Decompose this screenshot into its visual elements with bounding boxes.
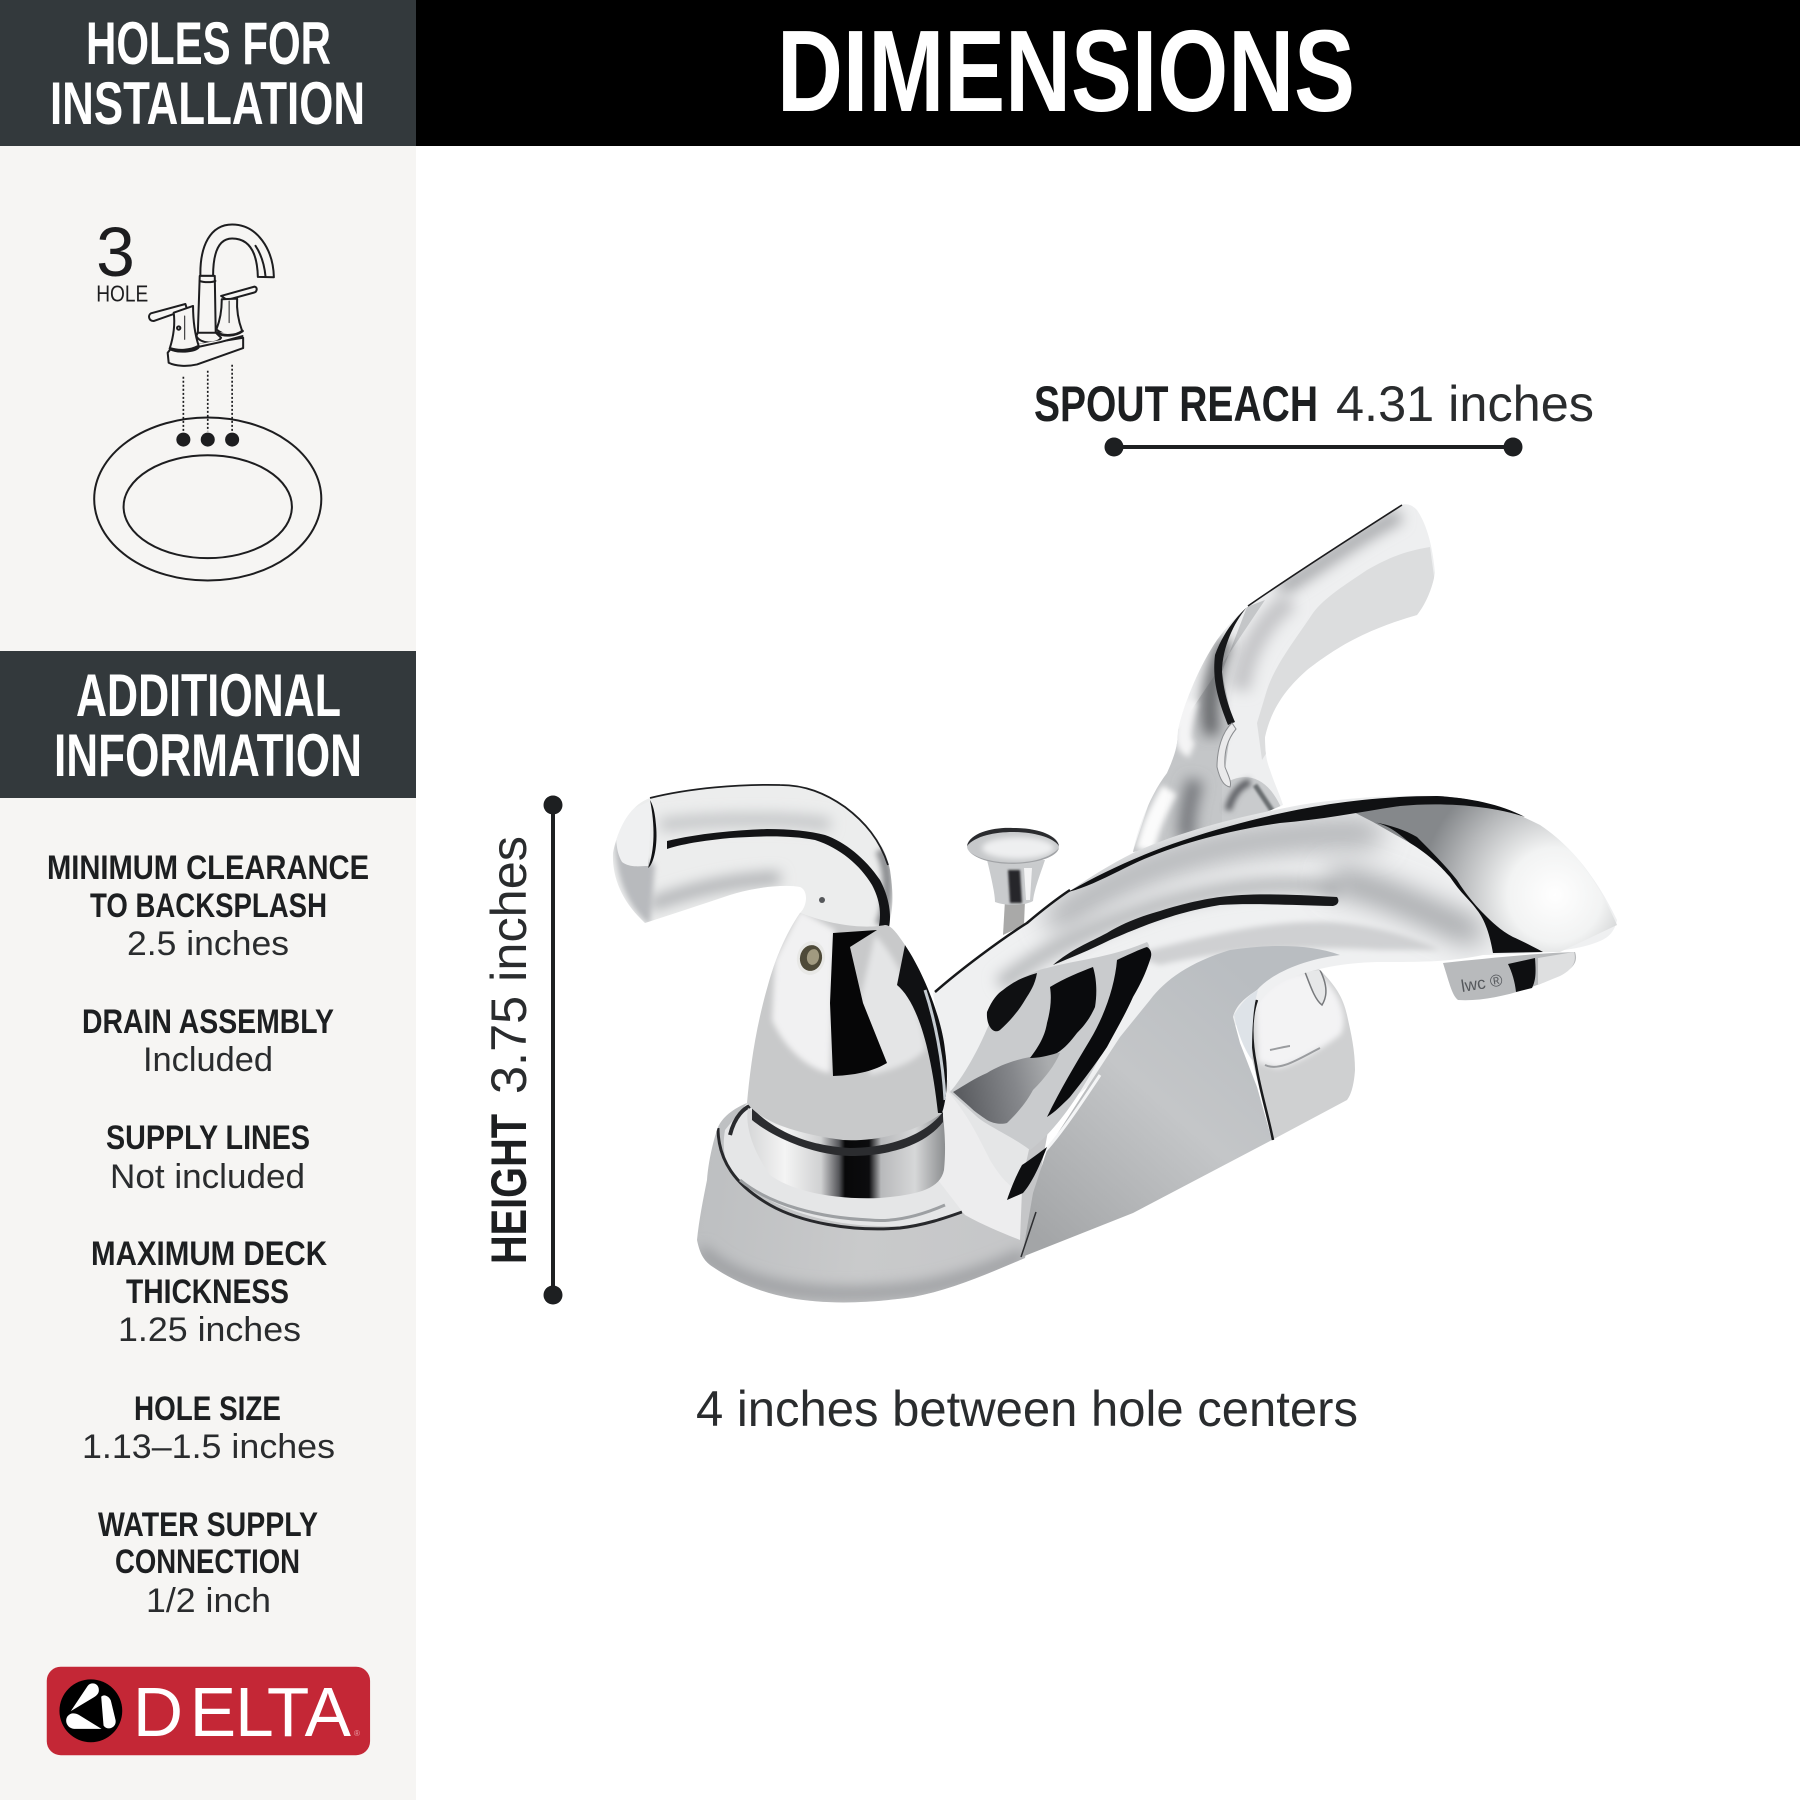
spout reach line	[1104, 438, 1522, 456]
header: holes for installation	[0, 0, 416, 146]
header bar: dimensions	[416, 0, 1800, 146]
spec: supply lines: SUPPLY LINES	[106, 1119, 310, 1157]
spec: minimum clearance	[47, 849, 369, 963]
body dark slash	[1007, 1147, 1047, 1200]
hub collar	[747, 1108, 945, 1198]
rear handle	[1130, 504, 1440, 860]
spec: supply lines	[106, 1119, 310, 1196]
spout body	[1007, 946, 1340, 1257]
header: additional information	[0, 651, 416, 798]
grip crease	[667, 829, 890, 931]
wordmark: D	[133, 1673, 183, 1751]
spec: maximum deck thickness	[91, 1235, 327, 1349]
spout nose	[1356, 796, 1617, 953]
hub right strip	[897, 945, 950, 1113]
icon: 3 hole faucet and sink	[94, 213, 321, 581]
spec: hole size: 1.13–1.5 inches	[82, 1428, 335, 1466]
spec: water supply connection: WATER SUPPLY	[98, 1506, 318, 1544]
dimension: height: 3.75 inches	[481, 836, 537, 1094]
spec: minimum clearance: MINIMUM CLEARANCE	[47, 849, 369, 887]
spec: maximum deck thickness: 1.25 inches	[118, 1311, 301, 1349]
left side panel	[0, 0, 416, 1800]
drain knob	[967, 828, 1059, 935]
height line	[544, 796, 562, 1304]
sink basin	[124, 455, 292, 558]
valve hole	[794, 938, 828, 978]
grip cap crease	[648, 800, 657, 868]
rear opening edge	[1252, 1000, 1273, 1140]
spec: supply lines: Not included	[110, 1158, 305, 1196]
header: additional information: ADDITIONAL	[76, 662, 341, 729]
front handle grip	[613, 785, 892, 933]
spec: drain assembly	[82, 1003, 334, 1079]
sink outer rim	[94, 418, 321, 581]
wordmark: T	[267, 1673, 309, 1751]
spout top band	[1068, 796, 1525, 892]
mounting holes	[176, 433, 239, 447]
dotted guide lines	[183, 365, 232, 431]
label: 3 hole: 3	[96, 213, 135, 291]
spout crease	[1053, 894, 1338, 965]
spec: water supply connection	[98, 1506, 318, 1620]
spec: minimum clearance: 2.5 inches	[127, 925, 289, 963]
spec: water supply connection: 1/2 inch	[146, 1582, 271, 1620]
grip top rim	[650, 785, 888, 865]
grip screw	[819, 897, 825, 903]
wordmark: L	[235, 1673, 274, 1751]
label: 3 hole	[96, 213, 148, 307]
header: holes for installation: HOLES FOR	[86, 10, 331, 77]
spec: minimum clearance: TO BACKSPLASH	[90, 887, 327, 925]
hub black reflection	[830, 930, 887, 1076]
spec: drain assembly: DRAIN ASSEMBLY	[82, 1003, 334, 1041]
aerator	[1443, 952, 1576, 1000]
title: DIMENSIONS	[777, 6, 1355, 136]
dimension: height: HEIGHT	[481, 1114, 537, 1264]
faucet line art	[149, 224, 274, 366]
nose dark curve	[1373, 822, 1543, 953]
rear base	[1252, 969, 1355, 1139]
logo mark	[59, 1679, 122, 1742]
dimension: spout reach: SPOUT REACH	[1034, 376, 1318, 432]
valley between hub and body	[938, 1085, 1022, 1240]
logo: delta	[47, 1667, 370, 1755]
spec: maximum deck thickness: THICKNESS	[126, 1273, 289, 1311]
note: hole centers: 4 inches between hole centers	[696, 1381, 1358, 1437]
spec: drain assembly: Included	[143, 1041, 273, 1079]
label: 3 hole: HOLE	[96, 281, 148, 307]
spec: maximum deck thickness: MAXIMUM DECK	[91, 1235, 327, 1273]
wordmark: A	[305, 1673, 352, 1751]
aerator: lwc ®	[1460, 971, 1504, 996]
body left edge highlight	[1044, 1075, 1100, 1152]
base plate	[697, 1080, 1050, 1302]
spec: water supply connection: CONNECTION	[115, 1543, 300, 1581]
spec: hole size: HOLE SIZE	[134, 1390, 281, 1428]
spec: hole size	[82, 1390, 335, 1466]
front split line	[1021, 1212, 1036, 1257]
spout	[933, 796, 1617, 1094]
faucet illustration	[613, 504, 1630, 1302]
front handle hub	[747, 910, 950, 1140]
logo: delta: ®	[354, 1729, 360, 1738]
header: additional information: INFORMATION	[54, 722, 362, 789]
spout left top line	[935, 890, 1070, 992]
handle clip	[1217, 723, 1236, 787]
dimension: spout reach: 4.31 inches	[1336, 376, 1594, 432]
cavity under spout	[950, 942, 1151, 1150]
wordmark: E	[190, 1673, 236, 1751]
dimension: height	[481, 796, 562, 1304]
dimension: spout reach	[1034, 376, 1594, 456]
header: holes for installation: INSTALLATION	[50, 70, 365, 137]
